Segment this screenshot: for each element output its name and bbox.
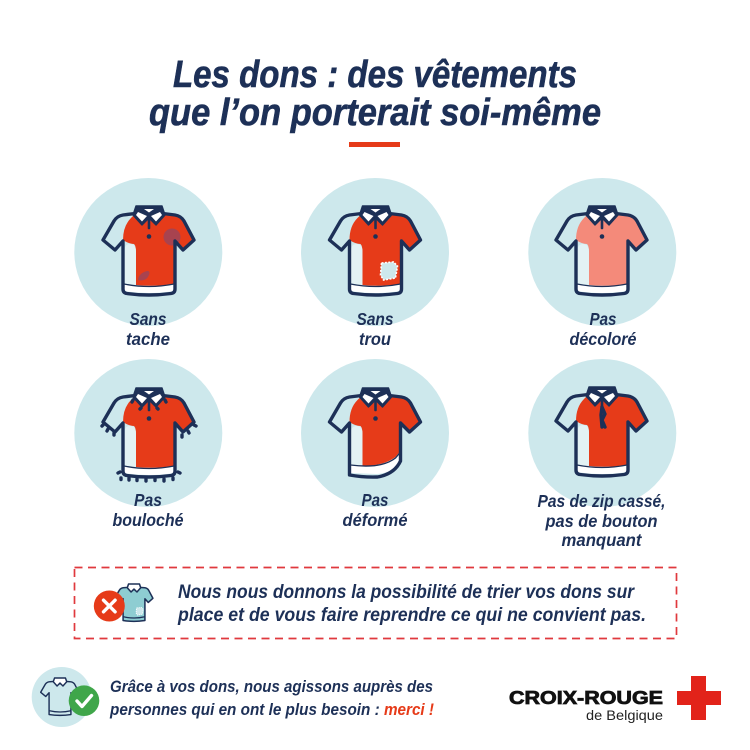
label [570,309,637,349]
panel: pas de zip cassé [528,359,676,550]
icon: shirt with hole [301,178,449,326]
title: que l’on porterait soi-même [149,92,601,134]
logo: Croix-Rouge de Belgique: de Belgique [586,708,663,723]
panel: sans tache [74,178,222,349]
label: Pas de zip cassé, [538,491,666,511]
label: trou [359,329,391,349]
label: déformé [342,510,408,530]
callout text [177,581,646,626]
label [126,309,170,349]
label [356,309,394,349]
callout text: place et de vous faire reprendre ce qui ne convient pas. [177,604,646,626]
label: Pas [362,490,389,510]
footer thank-you text: Grâce à vos dons, nous agissons auprès des [110,678,433,696]
icon: faded shirt [528,178,676,326]
panel: pas décoloré [528,178,676,349]
panel: pas déformé [301,359,449,530]
callout text: Nous nous donnons la possibilité de trier vos dons sur [178,581,635,603]
footer thank-you text [109,678,434,719]
title [149,54,601,134]
label [538,491,666,550]
label: Sans [130,309,167,329]
label: tache [126,329,170,349]
label: Pas [134,490,162,510]
logo: Croix-Rouge de Belgique: CROIX-ROUGE [509,687,663,708]
callout dashed frame [74,568,676,638]
label: décoloré [570,329,637,349]
icon: shirt with broken zip [528,359,676,507]
label: manquant [562,530,643,550]
title accent bar [349,142,400,147]
label: bouloché [112,510,184,530]
label [112,490,184,530]
icon: shirt with stains [74,178,222,326]
icon: deformed shirt [301,359,449,507]
panel: sans trou [301,178,449,349]
label [342,490,408,530]
icon: red cross [677,676,721,720]
icon: refused shirt [94,584,153,622]
icon: accepted shirt [32,667,99,727]
callout [74,568,676,638]
footer thank-you text: personnes qui en ont le plus besoin : merci ! [109,701,434,719]
label: Sans [356,309,394,329]
title: Les dons : des vêtements [173,54,577,96]
panel: pas bouloché [74,359,222,530]
logo: Croix-Rouge de Belgique [509,676,721,723]
label: pas de bouton [545,511,658,531]
icon: pilled shirt [74,359,222,507]
label: Pas [590,309,617,329]
